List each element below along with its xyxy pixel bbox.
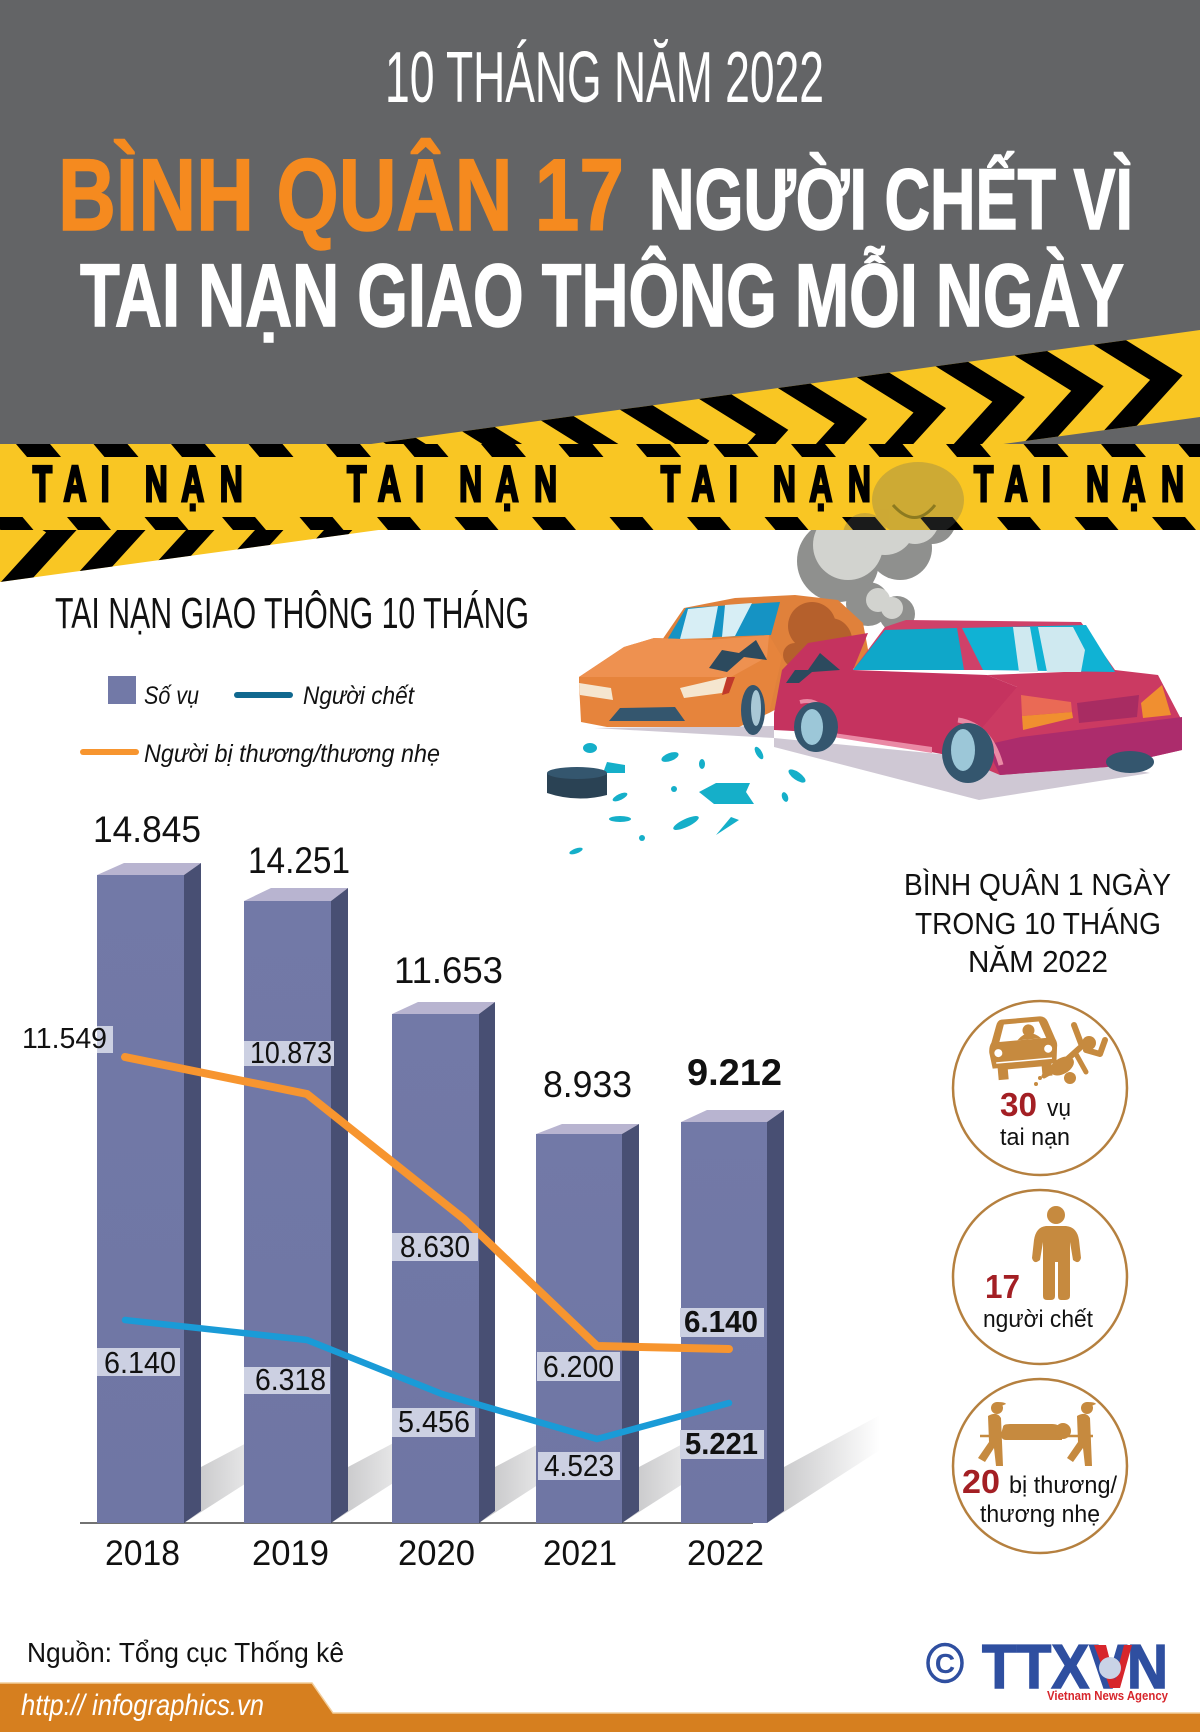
chart heading: TAI NẠN GIAO THÔNG 10 THÁNG <box>55 588 529 638</box>
orange car <box>579 595 870 735</box>
accident count: 30 <box>1000 1086 1037 1123</box>
band labels: TAI NẠN <box>33 456 243 512</box>
daily average heading <box>904 867 1171 979</box>
injured count: thương nhẹ <box>980 1501 1100 1528</box>
circle: injured <box>953 1379 1127 1553</box>
total labels: 14.845 <box>93 809 201 850</box>
line value labels: 8.630 <box>400 1229 470 1264</box>
line value labels <box>22 1023 764 1483</box>
line value labels: 11.549 <box>22 1023 107 1055</box>
year labels: 2022 <box>687 1534 764 1573</box>
title: BÌNH QUÂN 17 <box>58 138 624 252</box>
bar 2022 <box>681 1110 784 1523</box>
diagonal chevron tape <box>0 330 1200 582</box>
year labels: 2021 <box>543 1534 617 1573</box>
band labels: TAI NẠN <box>347 456 557 512</box>
debris <box>569 743 807 856</box>
legend: Người chết <box>303 682 415 710</box>
bar 2019 <box>244 888 348 1523</box>
total labels: 8.933 <box>543 1064 632 1105</box>
legend <box>83 676 440 768</box>
icon: car and motorbike <box>987 1015 1105 1086</box>
warning band <box>0 444 1200 530</box>
icon: person <box>1032 1206 1081 1300</box>
total labels: 14.251 <box>248 840 350 881</box>
circle: accidents <box>953 1001 1127 1175</box>
total labels: 9.212 <box>687 1052 782 1093</box>
injured count <box>962 1463 1117 1528</box>
accident count <box>1000 1086 1071 1151</box>
tire <box>547 767 607 799</box>
website: http:// infographics.vn <box>21 1689 264 1722</box>
line value labels: 5.456 <box>398 1404 470 1439</box>
line value labels: 6.318 <box>255 1362 326 1397</box>
band labels: TAI NẠN <box>974 456 1184 512</box>
accident count: tai nạn <box>1000 1124 1070 1151</box>
legend: Số vụ <box>144 682 199 710</box>
line value labels: 5.221 <box>685 1426 758 1461</box>
logo: C <box>935 1648 955 1679</box>
injured count: 20 <box>962 1463 1000 1500</box>
bar chart <box>80 809 880 1573</box>
header panel <box>0 0 1200 445</box>
line value labels: 6.140 <box>104 1345 176 1380</box>
year labels: 2018 <box>105 1534 180 1573</box>
bar 2021 <box>536 1124 639 1523</box>
total labels: 11.653 <box>394 950 503 991</box>
injured count: bị thương/ <box>1009 1472 1117 1499</box>
crash illustration <box>547 462 1182 856</box>
circle: deaths <box>953 1190 1127 1364</box>
death count: người chết <box>983 1306 1093 1333</box>
subtitle: 10 THÁNG NĂM 2022 <box>385 38 824 118</box>
line value labels: 4.523 <box>544 1448 614 1483</box>
death count <box>983 1268 1093 1333</box>
bar 2020 <box>392 1002 495 1523</box>
logo: Vietnam News Agency <box>1047 1688 1169 1703</box>
ground shadow <box>594 726 1150 800</box>
line value labels: 6.140 <box>684 1304 758 1339</box>
floor shadows <box>184 1415 880 1523</box>
band labels <box>33 456 1184 512</box>
total labels <box>93 809 782 1105</box>
accident count: vụ <box>1047 1095 1071 1122</box>
band labels: TAI NẠN <box>661 456 871 512</box>
red car <box>774 620 1182 783</box>
line value labels: 10.873 <box>250 1035 332 1070</box>
title <box>58 138 1133 345</box>
daily average heading: NĂM 2022 <box>968 944 1108 979</box>
injured line <box>125 1057 729 1349</box>
death count: 17 <box>985 1268 1020 1305</box>
daily average heading: TRONG 10 THÁNG <box>915 906 1161 941</box>
logo: TTXVN <box>982 1633 1168 1702</box>
source: Nguồn: Tổng cục Thống kê <box>27 1637 344 1668</box>
daily average heading: BÌNH QUÂN 1 NGÀY <box>904 867 1171 902</box>
year labels: 2019 <box>252 1534 329 1573</box>
year labels <box>105 1534 764 1573</box>
line value labels: 6.200 <box>543 1349 614 1384</box>
smoke <box>797 462 964 632</box>
footer bar <box>0 1683 1200 1732</box>
year labels: 2020 <box>398 1534 475 1573</box>
bar 2018 <box>97 863 201 1523</box>
deaths line <box>125 1320 729 1439</box>
legend: Người bị thương/thương nhẹ <box>144 740 440 768</box>
icon: stretcher bearers <box>978 1402 1096 1466</box>
